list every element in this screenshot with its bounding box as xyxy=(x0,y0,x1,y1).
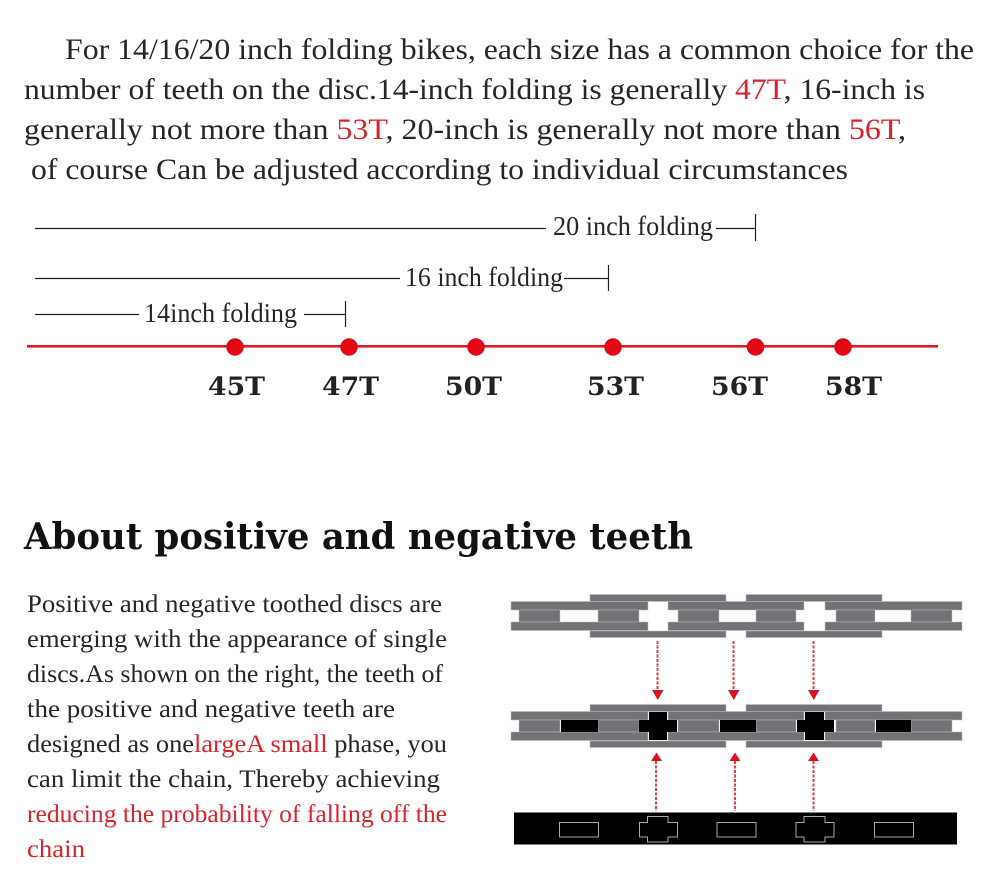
range: 20 inch folding: 20 inch folding xyxy=(553,211,713,241)
heading: About positive and negative teeth xyxy=(23,516,693,558)
teeth labels: 53T xyxy=(587,372,644,401)
explanation text block xyxy=(27,589,447,863)
teeth labels: 45T xyxy=(208,372,265,401)
teeth labels: 56T xyxy=(711,372,768,401)
explanation text block: the positive and negative teeth are xyxy=(27,694,395,723)
teeth labels: 47T xyxy=(322,372,379,401)
explanation text block: reducing the probability of falling off the xyxy=(27,799,447,828)
red teeth timeline xyxy=(27,338,938,356)
explanation text block: discs.As shown on the right, the teeth of xyxy=(27,659,444,688)
teeth labels: 50T xyxy=(445,372,502,401)
intro text block: generally not more than 53T, 20-inch is generally not more than 56T, xyxy=(24,113,906,146)
explanation text block: Positive and negative toothed discs are xyxy=(27,589,442,618)
intro text block: For 14/16/20 inch folding bikes, each size has a common choice for the xyxy=(65,33,974,66)
intro text block: number of teeth on the disc.14-inch folding is generally 47T, 16-inch is xyxy=(24,73,925,106)
disc alone xyxy=(514,812,957,844)
teeth labels: 58T xyxy=(825,372,882,401)
explanation text block: chain xyxy=(27,834,85,863)
arrows: chain down xyxy=(652,641,820,700)
intro text block xyxy=(24,33,974,186)
chain alone xyxy=(511,594,962,638)
intro text block: of course Can be adjusted according to individual circumstances xyxy=(31,153,848,186)
explanation text block: can limit the chain, Thereby achieving xyxy=(27,764,440,793)
range: 16 inch folding: 16 inch folding xyxy=(405,262,563,292)
size range chart xyxy=(27,211,938,401)
diagram: chain and disc engagement xyxy=(511,594,962,844)
chain engaged with disc teeth xyxy=(511,704,962,748)
teeth labels xyxy=(208,372,882,401)
range: 14 inch folding: 14inch folding xyxy=(144,298,297,328)
arrows: disc up xyxy=(651,752,819,811)
explanation text block: designed as onelargeA small phase, you xyxy=(27,729,447,758)
explanation text block: emerging with the appearance of single xyxy=(27,624,447,653)
